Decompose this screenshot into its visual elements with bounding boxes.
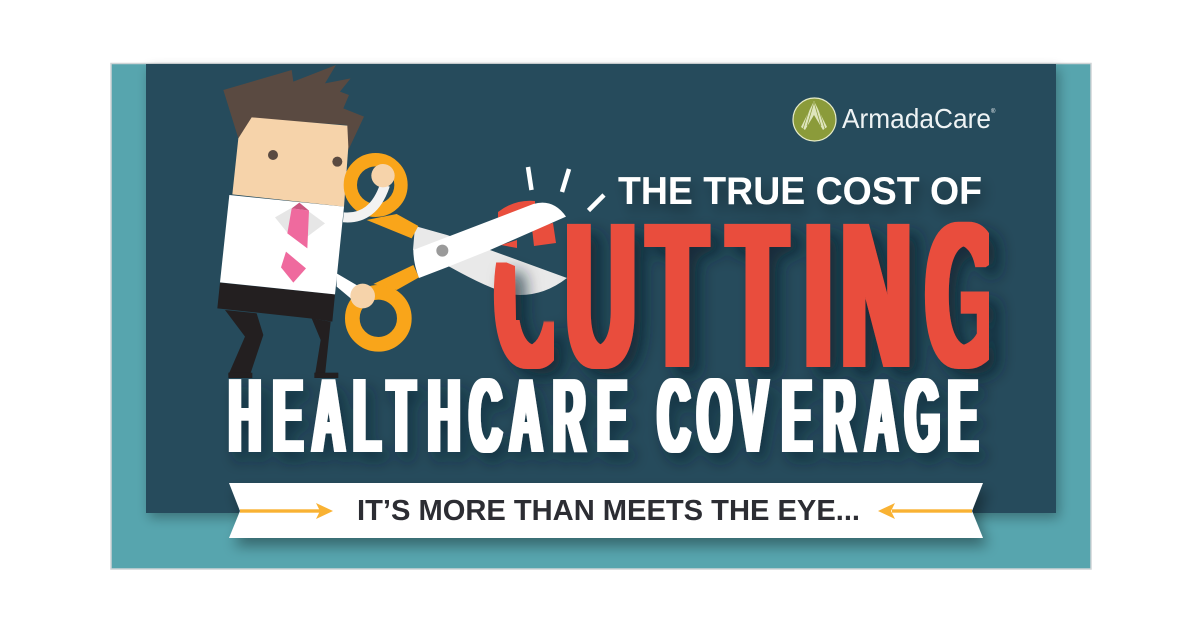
severed top of letter C bbox=[498, 201, 556, 248]
background frame bbox=[111, 64, 1091, 569]
tie bbox=[281, 203, 309, 283]
scissors necks bbox=[367, 214, 419, 290]
scissors lower blade bbox=[413, 226, 567, 295]
logo: ArmadaCare bbox=[793, 98, 996, 141]
lower hand bbox=[350, 284, 375, 308]
face bbox=[232, 117, 348, 207]
logo emblem bbox=[793, 98, 836, 141]
left arrow bbox=[240, 503, 333, 519]
trousers bbox=[217, 283, 335, 322]
shirt bbox=[220, 195, 344, 294]
eyes bbox=[268, 150, 342, 167]
scissors upper blade bbox=[413, 203, 566, 278]
heading: the true cost of: THE TRUE COST OF bbox=[618, 170, 982, 213]
ribbon banner bbox=[229, 483, 983, 538]
logo wordmark: ArmadaCare bbox=[842, 103, 991, 134]
man character bbox=[217, 65, 419, 378]
upper hand bbox=[371, 164, 395, 187]
heading: healthcare coverage: HEALTHCARE COVERAGE bbox=[229, 357, 978, 475]
heading: cutting: CUTTING bbox=[495, 179, 1000, 412]
dark panel bbox=[146, 64, 1056, 513]
right arrow bbox=[878, 503, 972, 519]
scissors pivot bbox=[436, 245, 448, 257]
lower arm bbox=[337, 273, 365, 303]
banner text: IT’S MORE THAN MEETS THE EYE... bbox=[357, 495, 860, 527]
registered mark: ® bbox=[991, 108, 996, 115]
scissors handles bbox=[350, 160, 404, 344]
upper arm bbox=[343, 185, 385, 218]
legs bbox=[225, 310, 338, 378]
collar bbox=[275, 208, 325, 237]
hair bbox=[223, 65, 364, 150]
snip marks bbox=[528, 167, 604, 210]
